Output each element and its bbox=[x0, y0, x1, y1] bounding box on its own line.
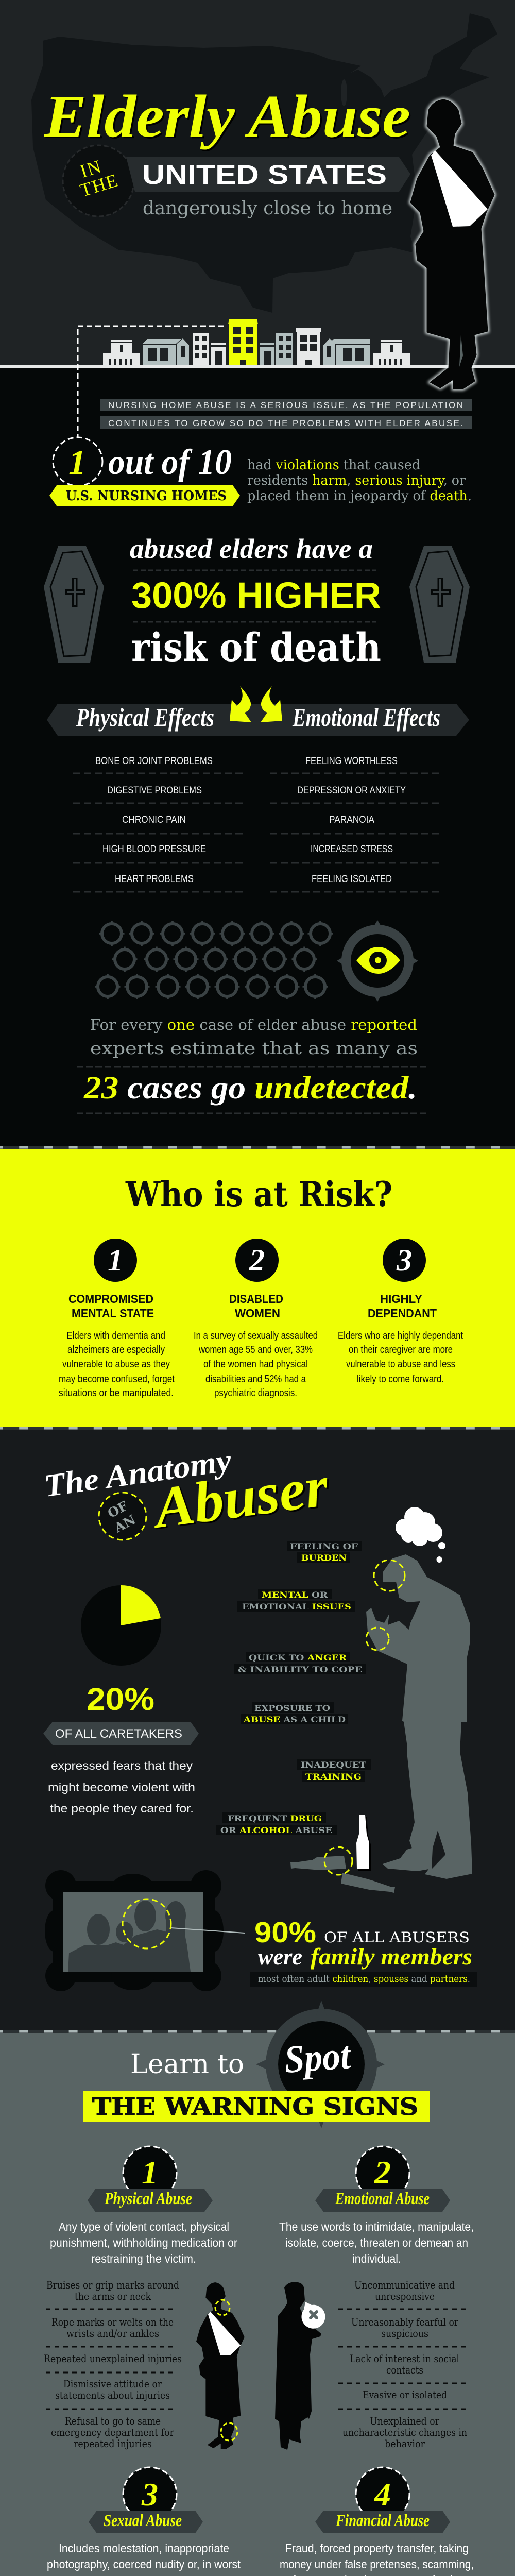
card 2: emotional abuse: Unreasonably fearful or bbox=[351, 2316, 458, 2328]
stat: 20 percent of caretakers: OF ALL CARETAKERS bbox=[55, 1727, 182, 1741]
label: mental or emotional issues: MENTAL OR bbox=[262, 1590, 328, 1600]
label: feeling of burden: FEELING OF bbox=[290, 1541, 358, 1551]
label: quick to anger: & INABILITY TO COPE bbox=[238, 1665, 362, 1674]
icon: big eye target bbox=[337, 920, 418, 1002]
risk 3: highly dependant: likely to come forward. bbox=[357, 1374, 444, 1385]
hero woman silhouette with sling bbox=[410, 99, 494, 389]
card 1: physical abuse: Bruises or grip marks around bbox=[46, 2279, 179, 2291]
label: inadequet training: INADEQUET bbox=[301, 1760, 366, 1770]
risk of death headline: 300% HIGHER bbox=[131, 575, 381, 616]
emotional effects list: FEELING ISOLATED bbox=[312, 874, 392, 885]
physical effects list: HEART PROBLEMS bbox=[115, 874, 194, 885]
risk 3: highly dependant: vulnerable to abuse and less bbox=[346, 1359, 455, 1370]
card 1: physical abuse: Physical Abuse bbox=[104, 2190, 192, 2208]
stat: 90 percent family members: 90% bbox=[254, 1916, 316, 1949]
stat description: had violations that caused bbox=[247, 457, 420, 473]
stat: 20 percent of caretakers: the people they cared for. bbox=[50, 1802, 194, 1815]
physical effects list: HIGH BLOOD PRESSURE bbox=[102, 844, 206, 855]
card 1: physical abuse: statements about injuries bbox=[55, 2389, 170, 2401]
risk 3: highly dependant: HIGHLY bbox=[380, 1292, 422, 1306]
effects banner: Physical Effects bbox=[76, 703, 214, 732]
stat description: placed them in jeopardy of death. bbox=[247, 488, 472, 504]
title: The Anatomy: The Anatomy bbox=[42, 1443, 234, 1504]
background: black stats band bbox=[0, 367, 515, 1146]
dashed connector bbox=[78, 326, 224, 437]
card 3: sexual abuse bbox=[45, 2467, 241, 2576]
arrow: left to physical effects bbox=[230, 686, 251, 722]
card 4: financial abuse: money under false pretenses, scamming, bbox=[280, 2557, 474, 2571]
stat: 90 percent family members bbox=[250, 1916, 477, 1987]
risk 2: disabled women: psychiatric diagnosis. bbox=[214, 1387, 297, 1399]
label: exposure to abuse bbox=[241, 1702, 348, 1724]
card 3: sexual abuse: photography, coerced nudity or, in worst bbox=[47, 2557, 241, 2571]
card 2: emotional abuse: contacts bbox=[386, 2364, 423, 2376]
stat: 1 out of 10 nursing homes bbox=[49, 437, 240, 506]
card 2: emotional abuse: 2 bbox=[374, 2154, 391, 2191]
undetected cases text: experts estimate that as many as bbox=[90, 1038, 418, 1058]
ribbon: United States: UNITED STATES bbox=[142, 160, 387, 190]
undetected cases text bbox=[77, 1016, 428, 1113]
card 1: physical abuse: punishment, withholding medication or bbox=[50, 2236, 237, 2249]
risk 1: compromised mental state: COMPROMISED bbox=[68, 1292, 153, 1306]
target icon grid: 23 undetected cases bbox=[96, 922, 332, 998]
background: who is at risk bbox=[0, 1148, 515, 1427]
card 2: emotional abuse: uncharacteristic changes in bbox=[342, 2426, 467, 2438]
injury markers bbox=[215, 2300, 237, 2441]
framed family portrait bbox=[45, 1870, 245, 1991]
card 3: sexual abuse: Sexual Abuse bbox=[104, 2512, 182, 2530]
risk 1: compromised mental state: Elders with dementia and bbox=[66, 1330, 165, 1342]
risk 2: disabled women: WOMEN bbox=[235, 1307, 280, 1320]
stat: 20 percent of caretakers bbox=[43, 1682, 199, 1815]
icon: right coffin bbox=[409, 546, 470, 663]
card 2: emotional abuse: suspicious bbox=[381, 2327, 428, 2340]
physical effects list: CHRONIC PAIN bbox=[122, 815, 186, 825]
icon: left coffin bbox=[44, 546, 104, 663]
background: warning signs bbox=[0, 2032, 515, 2576]
card 1: physical abuse: Repeated unexplained injuries bbox=[44, 2352, 182, 2365]
card 4: financial abuse: Fraud, forced property transfer, taking bbox=[285, 2541, 469, 2555]
label: drug or alcohol abuse bbox=[216, 1812, 337, 1835]
stat: 90 percent family members: family members bbox=[311, 1943, 472, 1970]
risk of death headline: abused elders have a bbox=[130, 533, 373, 564]
risk of death headline: risk of death bbox=[131, 624, 381, 670]
risk 1: compromised mental state: situations or be manipulated. bbox=[59, 1387, 174, 1399]
stat: 20 percent of caretakers: might become violent with bbox=[48, 1781, 195, 1794]
bottles bbox=[290, 1815, 395, 1893]
emotional effects list bbox=[270, 756, 441, 892]
card 1: physical abuse: Rope marks or welts on the bbox=[52, 2316, 174, 2328]
risk 3: highly dependant: 3 bbox=[396, 1243, 412, 1277]
label: drug or alcohol abuse: FREQUENT DRUG bbox=[228, 1814, 322, 1823]
stat: 20 percent of caretakers: expressed fears that they bbox=[51, 1759, 193, 1772]
figure: woman with speech bubble bbox=[275, 2282, 325, 2450]
card 1: physical abuse: the arms or neck bbox=[75, 2290, 151, 2302]
card 2: emotional abuse: Unexplained or bbox=[370, 2415, 439, 2427]
physical effects list: DIGESTIVE PROBLEMS bbox=[107, 785, 202, 796]
label: quick to anger bbox=[234, 1652, 366, 1674]
stat description: residents harm, serious injury, or bbox=[247, 473, 466, 488]
physical effects list: BONE OR JOINT PROBLEMS bbox=[95, 756, 213, 767]
card 2: emotional abuse: The use words to intimidate, manipulate, bbox=[279, 2220, 474, 2233]
risk 1: compromised mental state bbox=[59, 1239, 175, 1399]
risk 2: disabled women bbox=[194, 1239, 318, 1399]
stat: 1 out of 10 nursing homes: U.S. NURSING HOMES bbox=[66, 488, 227, 504]
card 1: physical abuse: 1 bbox=[142, 2154, 158, 2191]
intro text bars: NURSING HOME ABUSE IS A SERIOUS ISSUE. AS THE POPULATION bbox=[108, 400, 463, 410]
label: inadequet training bbox=[297, 1759, 371, 1782]
stat: 90 percent family members: were bbox=[258, 1943, 302, 1970]
heading: Learn to Spot: Learn to bbox=[130, 2049, 244, 2080]
stat: 1 out of 10 nursing homes: 1 bbox=[68, 443, 86, 482]
card 3: sexual abuse: Includes molestation, inappropriate bbox=[59, 2541, 229, 2555]
label: feeling of burden: BURDEN bbox=[301, 1553, 347, 1563]
card 2: emotional abuse: Emotional Abuse bbox=[335, 2190, 430, 2208]
risk 2: disabled women: In a survey of sexually assaulted bbox=[194, 1330, 318, 1342]
stat: 90 percent family members: most often adult children, spouses and partners. bbox=[258, 1973, 470, 1985]
card 1: physical abuse: emergency department for bbox=[51, 2426, 174, 2438]
effects banner: Emotional Effects bbox=[292, 703, 440, 732]
card 1: physical abuse: repeated injuries bbox=[74, 2437, 152, 2450]
heading: Learn to Spot: Spot bbox=[283, 2033, 353, 2081]
risk 2: disabled women: DISABLED bbox=[229, 1292, 283, 1306]
physical effects list bbox=[73, 756, 244, 892]
risk 1: compromised mental state: MENTAL STATE bbox=[72, 1307, 154, 1320]
ground line bbox=[0, 365, 515, 368]
undetected cases text: For every one case of elder abuse reported bbox=[90, 1016, 417, 1033]
emotional effects list: INCREASED STRESS bbox=[311, 844, 393, 855]
thought cloud bbox=[396, 1507, 445, 1563]
card 2: emotional abuse: individual. bbox=[352, 2252, 401, 2265]
card 2: emotional abuse: Lack of interest in social bbox=[350, 2352, 459, 2365]
heading: Who is at Risk?: Who is at Risk? bbox=[125, 1174, 392, 1214]
emotional effects list: PARANOIA bbox=[329, 815, 374, 825]
arrow: right to emotional effects bbox=[261, 686, 282, 722]
label: inadequet training: TRAINING bbox=[305, 1772, 362, 1782]
stat: 90 percent family members: OF ALL ABUSERS bbox=[324, 1929, 470, 1946]
badge: in the: THE bbox=[78, 170, 121, 201]
effects banner bbox=[47, 703, 469, 736]
intro text bars: CONTINUES TO GROW SO DO THE PROBLEMS WITH ELDER ABUSE. bbox=[108, 418, 463, 428]
heading: the warning signs: THE WARNING SIGNS bbox=[92, 2093, 418, 2121]
risk 2: disabled women: of the women had physical bbox=[203, 1359, 308, 1370]
label: feeling of burden bbox=[287, 1541, 362, 1563]
card 1: physical abuse: Any type of violent contact, physical bbox=[59, 2220, 229, 2233]
title: Elderly Abuse: Elderly Abuse bbox=[44, 82, 410, 150]
card 2: emotional abuse: unresponsive bbox=[375, 2290, 435, 2302]
card 4: financial abuse bbox=[280, 2467, 474, 2576]
title: Abuser: Abuser bbox=[148, 1454, 333, 1541]
badge: in the bbox=[63, 145, 134, 216]
label: exposure to abuse: EXPOSURE TO bbox=[254, 1703, 330, 1713]
card 1: physical abuse: restraining the victim. bbox=[91, 2252, 196, 2265]
map of the United States bbox=[31, 13, 497, 313]
risk 3: highly dependant: on their caregiver are more bbox=[349, 1344, 453, 1355]
badge: in the: IN bbox=[78, 156, 105, 182]
risk 3: highly dependant: DEPENDANT bbox=[368, 1307, 437, 1320]
label: quick to anger: QUICK TO ANGER bbox=[249, 1653, 347, 1663]
risk 2: disabled women: women age 55 and over, 33% bbox=[198, 1344, 313, 1355]
card 4: financial abuse: Financial Abuse bbox=[335, 2512, 430, 2530]
risk of death headline bbox=[130, 533, 381, 670]
intro text bars bbox=[100, 399, 472, 429]
ribbon: United States bbox=[126, 157, 410, 192]
label: mental or emotional issues bbox=[237, 1589, 355, 1612]
risk 1: compromised mental state: alzheimers are especially bbox=[67, 1344, 165, 1355]
risk 1: compromised mental state: vulnerable to abuse as they bbox=[62, 1359, 170, 1370]
badge: of an bbox=[99, 1493, 146, 1540]
emotional effects list: FEELING WORTHLESS bbox=[305, 756, 398, 767]
risk 1: compromised mental state: 1 bbox=[108, 1243, 123, 1277]
card 1: physical abuse bbox=[44, 2146, 237, 2450]
card 4: financial abuse: 4 bbox=[374, 2476, 391, 2513]
undetected cases text: 23 cases go undetected . bbox=[83, 1071, 417, 1106]
card 1: physical abuse: Refusal to go to same bbox=[65, 2415, 161, 2427]
card 1: physical abuse: wrists and/or ankles bbox=[66, 2327, 159, 2340]
label: exposure to abuse: ABUSE AS A CHILD bbox=[243, 1715, 346, 1724]
card 3: sexual abuse: 3 bbox=[141, 2476, 158, 2513]
card 2: emotional abuse: behavior bbox=[385, 2437, 425, 2450]
spot target bbox=[256, 2001, 385, 2128]
stat description bbox=[247, 457, 472, 504]
town skyline bbox=[103, 319, 410, 365]
label: drug or alcohol abuse: OR ALCOHOL ABUSE bbox=[220, 1825, 332, 1835]
card 2: emotional abuse bbox=[279, 2146, 474, 2450]
badge: of an: AN bbox=[111, 1512, 138, 1536]
badge: of an: OF bbox=[105, 1498, 130, 1521]
card 2: emotional abuse: Evasive or isolated bbox=[363, 2388, 447, 2401]
heading: Learn to Spot bbox=[130, 2033, 353, 2081]
figure: woman with sling bbox=[196, 2282, 245, 2449]
subtitle: dangerously close to home bbox=[143, 198, 392, 219]
risk 1: compromised mental state: may become confused, forget bbox=[59, 1374, 175, 1385]
abuser silhouette bbox=[366, 1554, 472, 1879]
label: mental or emotional issues: EMOTIONAL ISSUES bbox=[242, 1602, 351, 1612]
risk 3: highly dependant: Elders who are highly dependant bbox=[338, 1330, 463, 1342]
background: anatomy of an abuser bbox=[0, 1429, 515, 2030]
risk 2: disabled women: 2 bbox=[249, 1243, 265, 1277]
risk 3: highly dependant bbox=[338, 1239, 463, 1385]
card 2: emotional abuse: Uncommunicative and bbox=[354, 2279, 455, 2291]
stat: 20 percent of caretakers: 20% bbox=[87, 1682, 154, 1717]
pie chart: 20 percent bbox=[81, 1585, 161, 1666]
risk 2: disabled women: disabilities and 52% had a bbox=[205, 1374, 306, 1385]
emotional effects list: DEPRESSION OR ANXIETY bbox=[297, 785, 406, 796]
card 2: emotional abuse: isolate, coerce, threaten or demean an bbox=[285, 2236, 468, 2249]
stat: 1 out of 10 nursing homes: out of 10 bbox=[108, 443, 232, 482]
background: hero bbox=[0, 0, 515, 367]
card 1: physical abuse: Dismissive attitude or bbox=[63, 2378, 162, 2390]
